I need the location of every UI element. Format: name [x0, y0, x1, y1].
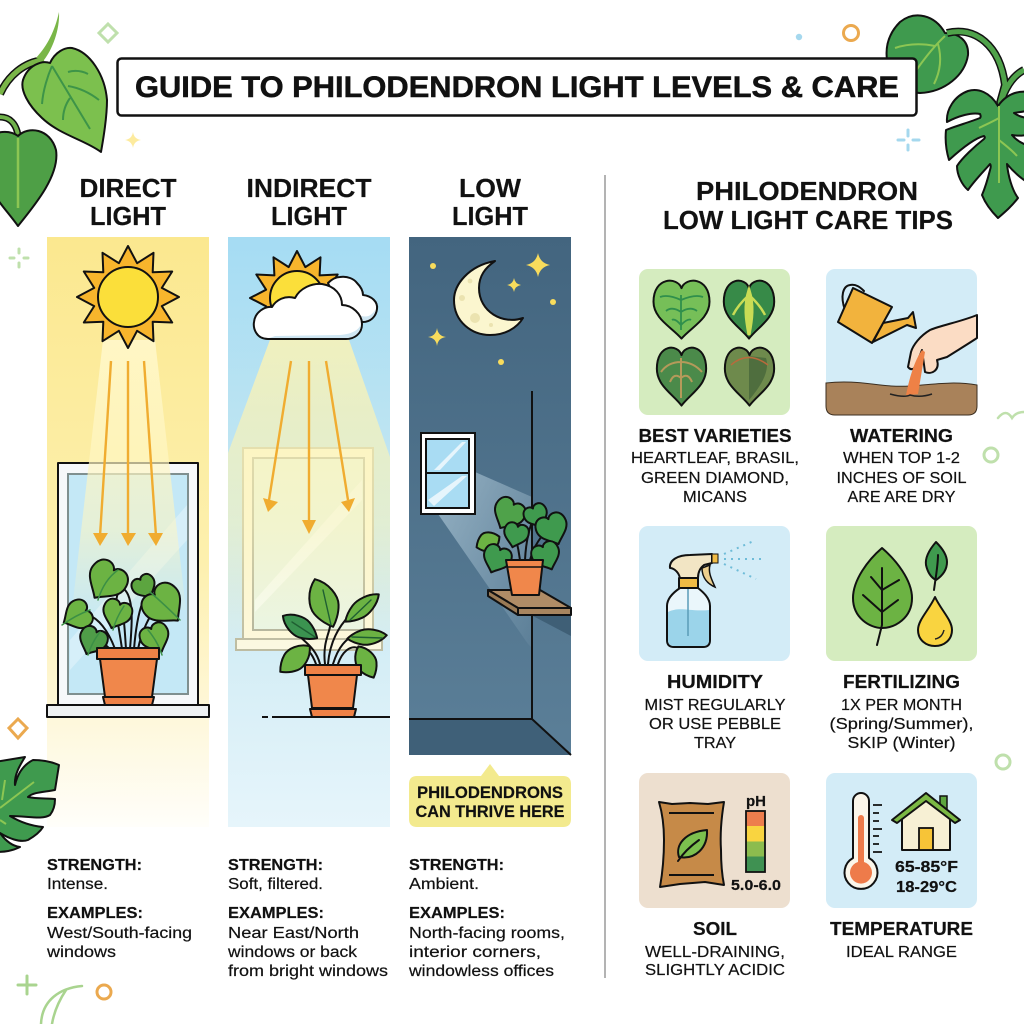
soil	[826, 382, 977, 415]
label: fertilizing: 1X PER MONTH	[841, 697, 962, 714]
text: low light details: Ambient.	[409, 876, 479, 893]
text: indirect light details: Soft, filtered.	[228, 876, 323, 893]
plant on shelf	[472, 493, 573, 595]
decoration: top-right leaves	[887, 15, 1024, 218]
icon: small window	[421, 433, 475, 514]
chart: pH scale: pH	[746, 793, 766, 810]
chart: pH scale: 5.0-6.0	[731, 878, 781, 894]
title banner: GUIDE TO PHILODENDRON LIGHT LEVELS & CARE	[135, 71, 899, 104]
label: humidity	[644, 672, 786, 752]
ground line	[262, 716, 390, 718]
plant on windowsill	[57, 555, 193, 705]
icon: house	[892, 793, 960, 850]
heading: indirect light	[246, 173, 372, 231]
light beam	[228, 337, 390, 650]
card: watering	[826, 269, 977, 506]
icon: stars	[428, 253, 556, 365]
panel background	[47, 237, 209, 827]
label: best varieties: BEST VARIETIES	[638, 426, 792, 446]
card: temperature	[826, 773, 977, 961]
text: direct light details	[46, 857, 192, 961]
card: best varieties	[631, 269, 799, 506]
label: humidity: OR USE PEBBLE	[649, 716, 781, 733]
plant on floor	[262, 574, 390, 717]
wall corner lines	[409, 391, 571, 755]
card: humidity	[639, 526, 790, 752]
label: best varieties: GREEN DIAMOND,	[641, 470, 789, 487]
label: fertilizing	[830, 672, 974, 752]
label: watering: WATERING	[850, 426, 953, 446]
panel: low light	[409, 237, 573, 755]
label: humidity: MIST REGULARLY	[644, 697, 786, 714]
heading: low light	[452, 173, 528, 231]
heading: care tips: PHILODENDRON	[696, 176, 918, 206]
heading: direct light: DIRECT	[80, 173, 177, 203]
label: temperature: IDEAL RANGE	[846, 944, 957, 961]
label: fertilizing: FERTILIZING	[843, 672, 960, 692]
heading: indirect light: LIGHT	[271, 201, 347, 231]
card: soil	[639, 773, 790, 979]
text: direct light details: windows	[46, 944, 116, 961]
label: watering: ARE ARE DRY	[848, 489, 956, 506]
light beam from window	[438, 472, 532, 648]
icon: mist	[724, 540, 765, 579]
card: fertilizing	[826, 526, 977, 752]
icon: crescent moon	[454, 261, 523, 335]
icon: window	[47, 463, 209, 717]
heading: care tips	[663, 176, 953, 235]
text: low light details: windowless offices	[408, 963, 554, 980]
text: direct light details: STRENGTH:	[47, 857, 142, 874]
arrows: direct sunlight	[93, 361, 163, 546]
arrows: filtered light	[263, 361, 355, 534]
label: watering: INCHES OF SOIL	[836, 470, 967, 487]
text: indirect light details: windows or back	[227, 944, 357, 961]
heading: direct light: LIGHT	[90, 201, 166, 231]
temperature values	[895, 859, 958, 896]
title banner	[118, 58, 916, 116]
label: temperature	[830, 919, 973, 961]
text: direct light details: EXAMPLES:	[47, 905, 143, 922]
temperature values: 65-85°F	[895, 859, 958, 876]
text: indirect light details	[227, 857, 388, 980]
decoration: lower-left monstera leaf	[0, 757, 59, 852]
callout: philodendrons can thrive here: CAN THRIVE HERE	[416, 802, 564, 821]
panel background	[409, 237, 571, 755]
icon: sun behind clouds	[250, 251, 377, 339]
icon: soil bag	[659, 802, 724, 887]
label: best varieties	[631, 426, 799, 506]
text: low light details	[408, 857, 565, 980]
label: soil	[645, 919, 785, 979]
floor	[409, 719, 571, 755]
panel: indirect light	[228, 237, 390, 827]
light beam	[72, 340, 186, 610]
heading: low light: LOW	[459, 173, 521, 203]
icon: large leaf	[853, 548, 912, 645]
label: soil: SLIGHTLY ACIDIC	[645, 962, 785, 979]
label: temperature: TEMPERATURE	[830, 919, 973, 939]
text: indirect light details: Near East/North	[228, 925, 359, 942]
label: best varieties: MICANS	[683, 489, 747, 506]
label: humidity: TRAY	[694, 735, 736, 752]
icon: hand testing soil	[890, 315, 977, 396]
label: best varieties: HEARTLEAF, BRASIL,	[631, 450, 799, 467]
label: watering	[836, 426, 967, 506]
text: indirect light details: EXAMPLES:	[228, 905, 324, 922]
icon: fertilizer drop	[918, 597, 952, 646]
text: low light details: interior corners,	[409, 944, 541, 961]
chart: pH scale	[731, 793, 781, 894]
text: direct light details: West/South-facing	[47, 925, 192, 942]
icon: four leaf varieties	[654, 281, 774, 406]
text: low light details: EXAMPLES:	[409, 905, 505, 922]
heading: care tips: LOW LIGHT CARE TIPS	[663, 205, 953, 235]
icon: spray bottle	[667, 554, 718, 647]
divider	[604, 175, 606, 978]
decoration: top-left leaves	[0, 12, 107, 226]
text: direct light details: Intense.	[47, 876, 108, 893]
icon: sun	[77, 246, 179, 348]
icon: small leaf	[926, 542, 947, 590]
text: indirect light details: from bright windows	[228, 963, 388, 980]
label: fertilizing: (Spring/Summer),	[830, 716, 974, 733]
icon: faded window	[236, 448, 382, 650]
text: indirect light details: STRENGTH:	[228, 857, 323, 874]
heading: direct light	[80, 173, 177, 231]
icon: thermometer	[844, 793, 882, 889]
callout: philodendrons can thrive here: PHILODENDRONS	[417, 783, 563, 802]
text: low light details: STRENGTH:	[409, 857, 504, 874]
label: watering: WHEN TOP 1-2	[843, 450, 960, 467]
heading: low light: LIGHT	[452, 201, 528, 231]
label: soil: SOIL	[693, 919, 737, 939]
panel: direct light	[47, 237, 209, 827]
callout: philodendrons can thrive here	[409, 764, 571, 827]
heading: indirect light: INDIRECT	[246, 173, 372, 203]
label: fertilizing: SKIP (Winter)	[848, 735, 956, 752]
text: low light details: North-facing rooms,	[409, 925, 565, 942]
label: humidity: HUMIDITY	[667, 672, 763, 692]
panel background	[228, 237, 390, 827]
icon: wall shelf	[488, 590, 571, 636]
label: soil: WELL-DRAINING,	[645, 944, 785, 961]
icon: watering can	[838, 285, 916, 343]
temperature values: 18-29°C	[896, 879, 957, 896]
